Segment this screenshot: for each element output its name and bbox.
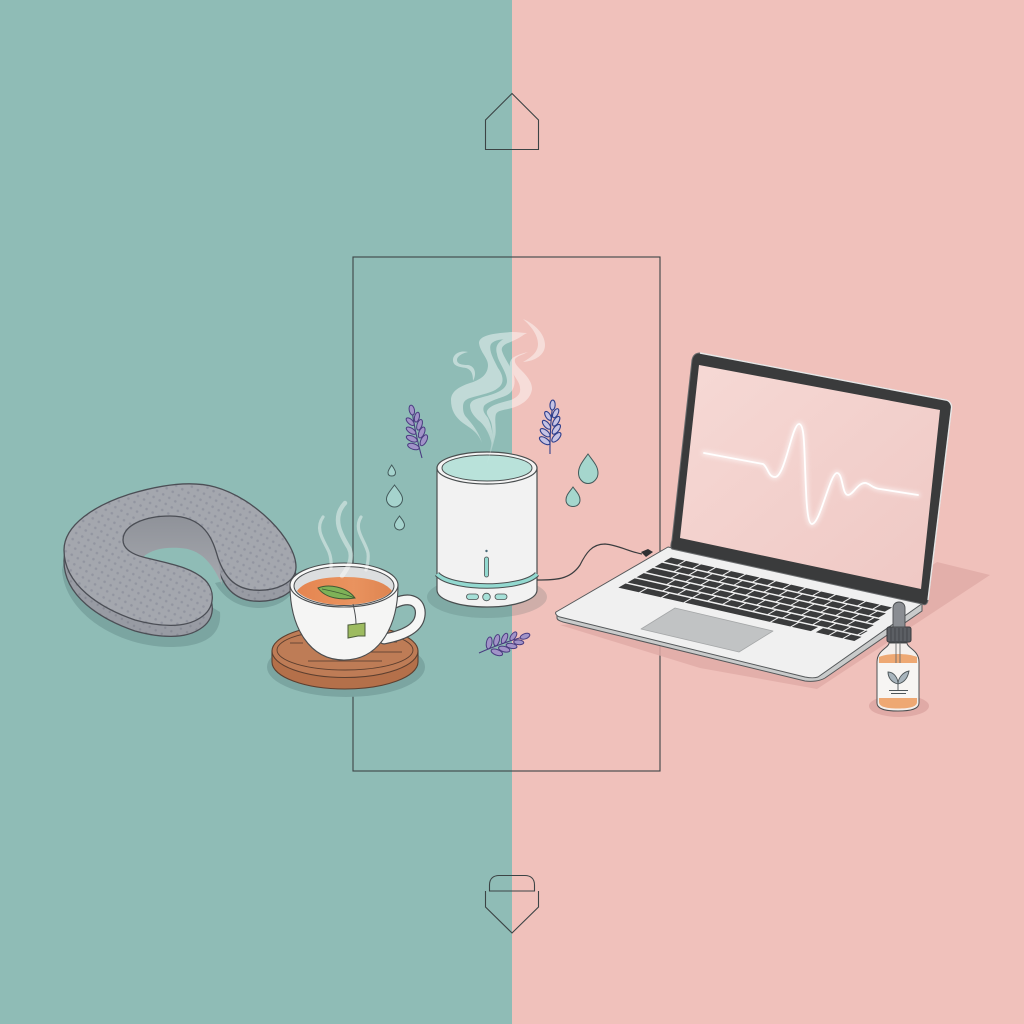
wooden coaster [272, 624, 418, 689]
icon: bottom pentagon with cap [486, 876, 538, 933]
tea bag [348, 604, 365, 638]
lavender sprig: upper right [537, 399, 564, 455]
pillow shadow: right lobe [215, 575, 296, 608]
bottle cap [887, 627, 911, 642]
water droplets: right [566, 454, 598, 506]
oil dropper bottle [869, 602, 929, 717]
diffuser light band [437, 574, 537, 586]
tea cup on wooden coaster [267, 503, 425, 697]
cup inner wall [294, 566, 394, 606]
pillow side [64, 495, 296, 636]
laptop plug [641, 549, 653, 557]
laptop lid [671, 353, 952, 605]
tea leaf [318, 586, 355, 599]
background: teal half [0, 0, 512, 1024]
laptop shadow [560, 562, 990, 689]
pillow top surface [64, 484, 296, 625]
lavender sprig: upper left [398, 403, 433, 461]
lavender sprig: bottom [475, 623, 534, 664]
dropper tube [896, 640, 900, 663]
cup rim [290, 563, 398, 607]
laptop base top [556, 547, 923, 678]
laptop base side [557, 604, 922, 681]
laptop [556, 353, 990, 689]
bottle label [878, 663, 918, 698]
diffuser steam [451, 319, 545, 464]
trackpad [641, 608, 773, 652]
diffuser [427, 452, 547, 618]
diffuser body [437, 468, 537, 607]
background: pink half [512, 0, 1024, 1024]
bottle shadow [869, 695, 929, 717]
cup handle [384, 600, 420, 639]
power cable [537, 544, 642, 580]
cup steam [320, 503, 368, 576]
lid silver edge [700, 353, 952, 600]
water droplets: left [386, 465, 404, 530]
laptop screen [680, 365, 940, 589]
pillow shadow: lower lobe [62, 560, 220, 647]
coaster shadow [267, 637, 425, 697]
neck pillow [62, 484, 296, 647]
diffuser water [442, 455, 532, 481]
bottle oil [879, 654, 917, 708]
diffuser indicator [484, 550, 488, 577]
diffuser buttons [466, 593, 507, 601]
heartbeat line [704, 424, 918, 524]
tea surface [297, 577, 392, 605]
keyboard [622, 560, 903, 639]
cap ribs [891, 628, 907, 641]
cup body [290, 585, 398, 660]
central frame [353, 257, 660, 771]
icon: house outline [486, 94, 538, 150]
bottle glass [877, 643, 919, 711]
diffuser shadow [427, 576, 547, 618]
pillow hole wall [123, 516, 222, 585]
dropper bulb [893, 602, 905, 627]
diffuser top rim [437, 452, 537, 484]
